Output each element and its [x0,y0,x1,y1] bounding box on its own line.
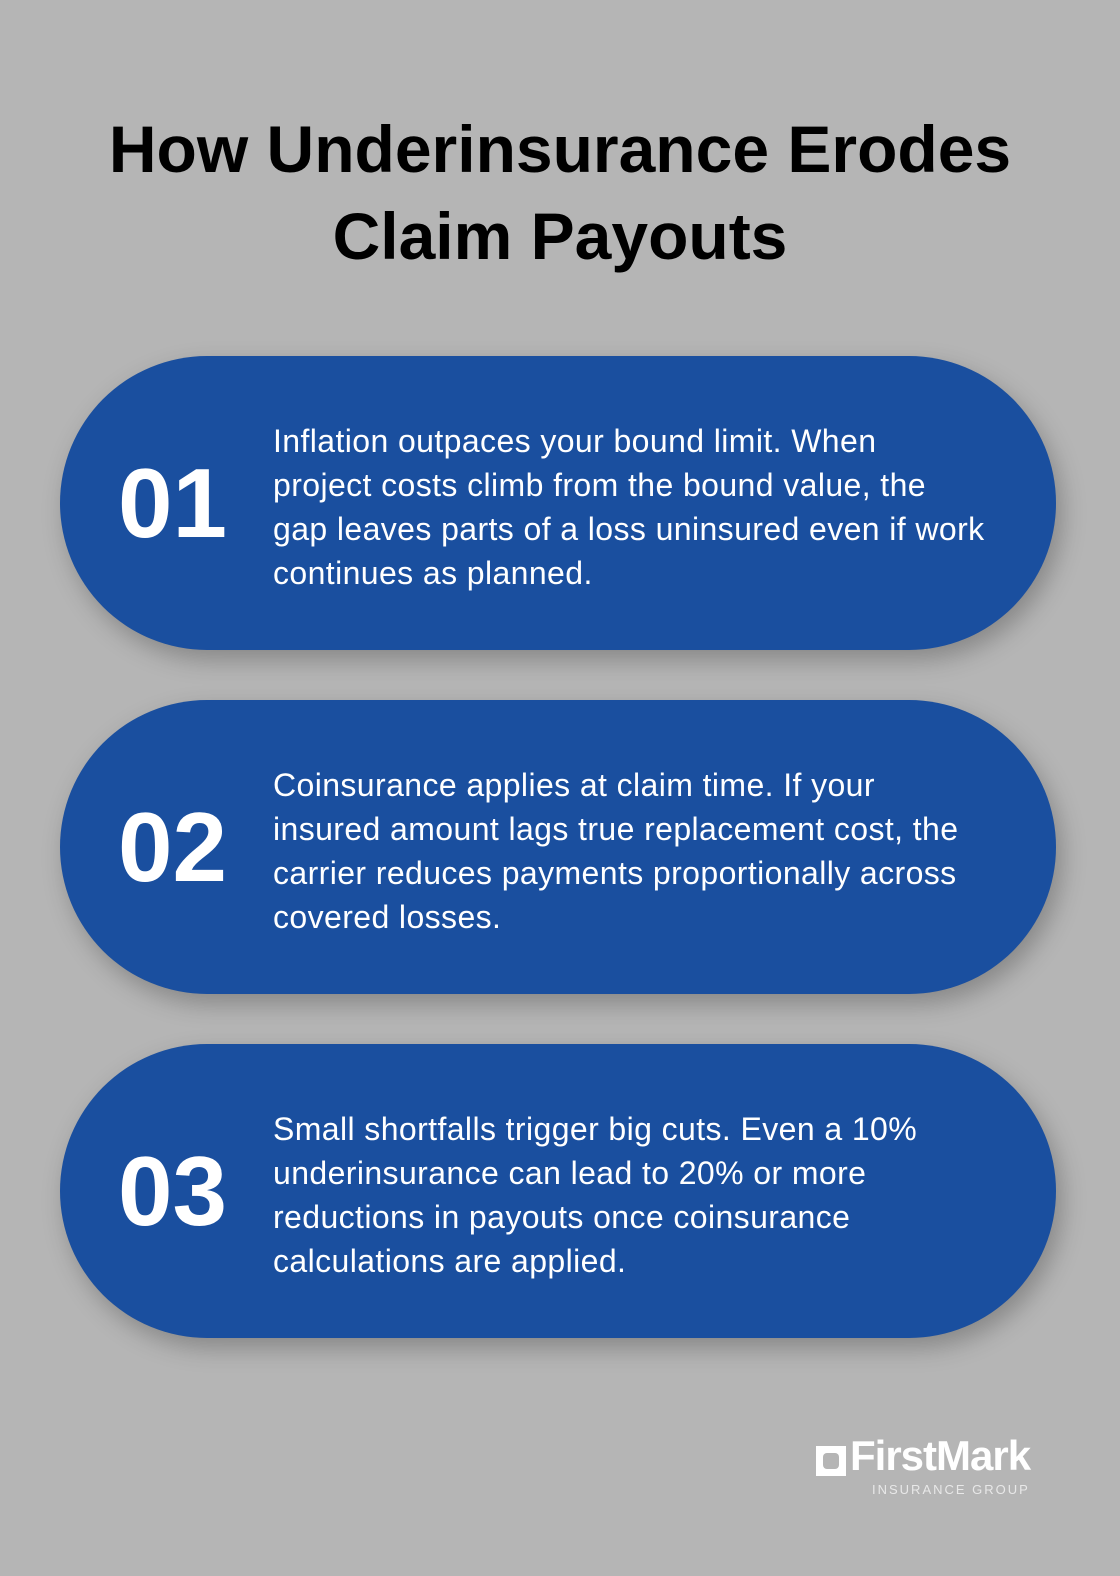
text 01: gap leaves parts of a loss uninsured even if work [273,511,985,547]
text 01: Inflation outpaces your bound limit. When [273,423,876,459]
logo: FirstMark [850,1432,1030,1479]
number 02: 02 [118,792,227,902]
panel: step 01 [60,356,1056,650]
text 03: reductions in payouts once coinsurance [273,1199,850,1235]
text 01: continues as planned. [273,555,593,591]
logo: INSURANCE GROUP [872,1482,1030,1497]
panel: step 02 [60,700,1056,994]
text 03: calculations are applied. [273,1243,626,1279]
text 02: covered losses. [273,899,501,935]
text 02: carrier reduces payments proportionally across [273,855,957,891]
text 03 [273,1111,917,1279]
logo [816,1432,1031,1497]
title: Claim Payouts [333,199,787,273]
text 01 [273,423,985,591]
text 03: underinsurance can lead to 20% or more [273,1155,866,1191]
panel: step 03 [60,1044,1056,1338]
text 02 [273,767,958,935]
number 01: 01 [118,448,227,558]
text 03: Small shortfalls trigger big cuts. Even a 10% [273,1111,917,1147]
text 02: insured amount lags true replacement cost, the [273,811,958,847]
number 03: 03 [118,1136,227,1246]
text 02: Coinsurance applies at claim time. If your [273,767,875,803]
title [109,112,1011,273]
title: How Underinsurance Erodes [109,112,1011,186]
text 01: project costs climb from the bound value, the [273,467,926,503]
